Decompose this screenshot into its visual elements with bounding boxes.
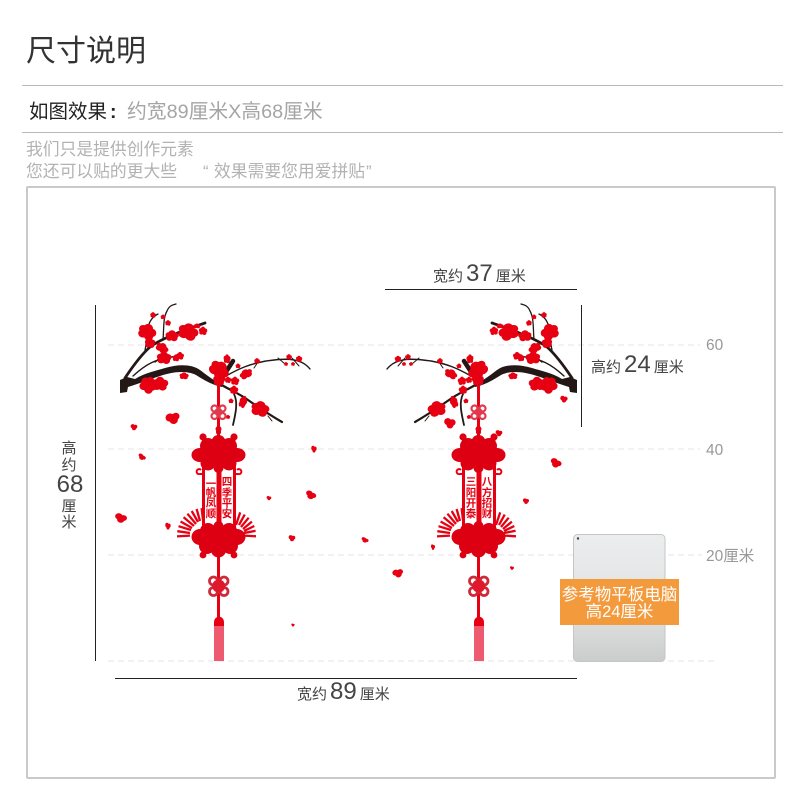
- dimension: left height text: 68: [57, 471, 83, 498]
- fans: [177, 508, 203, 536]
- side rails: [202, 462, 236, 528]
- dimension: right height line: [581, 305, 582, 427]
- curls: [197, 469, 241, 474]
- callout: tablet label: [560, 579, 679, 625]
- dimension: left height text: 米: [61, 514, 77, 531]
- grid lines: [108, 345, 718, 661]
- dimension: left height line: [95, 305, 96, 661]
- title: 尺寸说明: [26, 35, 146, 68]
- dimension: left height text: 约: [61, 457, 77, 474]
- dimension: bottom width text: 宽约89厘米: [297, 678, 390, 705]
- falling petals: [114, 396, 568, 627]
- subtitle: effect size: :: [110, 101, 116, 123]
- tablet reference object: [574, 534, 665, 662]
- dimension: left height text: [57, 440, 83, 531]
- right ornament text: 三: [466, 476, 476, 488]
- left ornament text: 帆: [206, 486, 217, 499]
- note text: ”: [366, 162, 372, 181]
- note text: 您还可以贴的更大些: [26, 162, 177, 181]
- dimension: right height text: 高约24厘米: [591, 351, 684, 378]
- upper small knot: [212, 406, 226, 419]
- right ornament text: 阳: [466, 486, 476, 499]
- dimension: top width text: 宽约37厘米: [433, 260, 526, 287]
- dimension: top width line: [385, 289, 577, 290]
- upper flower knot: [192, 429, 246, 473]
- left ornament text: 季: [222, 486, 233, 499]
- divider line bottom: [22, 132, 783, 133]
- subtitle: effect size: 如图效果: [29, 101, 107, 123]
- branch: left plum tree: [120, 304, 310, 425]
- left ornament text: 平: [222, 498, 233, 510]
- dimension: left height text: 高: [61, 440, 77, 457]
- right ornament text: 方: [482, 486, 492, 499]
- grid label 40: 40: [706, 442, 724, 459]
- right ornament text: [466, 476, 493, 520]
- note text: [26, 140, 372, 181]
- branches: [120, 365, 222, 393]
- divider line top: [22, 85, 783, 86]
- left ornament text: 凤: [206, 497, 217, 509]
- callout: tablet label: 高24厘米: [586, 602, 653, 621]
- grid label 60: 60: [706, 337, 724, 354]
- note text: “: [203, 162, 209, 181]
- dimension: left height text: 厘: [61, 498, 77, 515]
- right ornament text: 泰: [466, 507, 477, 520]
- blossoms: [136, 312, 302, 419]
- left ornament text: 顺: [206, 508, 217, 520]
- callout: tablet label: 参考物平板电脑: [562, 585, 677, 604]
- rope: [217, 385, 220, 620]
- left ornament text: 一: [206, 478, 217, 490]
- left ornament text: 四: [222, 476, 232, 488]
- ornament: right hanging Chinese knot: [437, 385, 516, 661]
- left ornament text: 安: [222, 507, 232, 520]
- ornament: left hanging Chinese knot: [177, 385, 256, 661]
- left ornament text: [206, 476, 233, 520]
- lower flower knot: [192, 521, 246, 558]
- dimension: bottom width line: [115, 678, 577, 679]
- grid label 20 cm: 20厘米: [706, 547, 754, 565]
- right ornament text: 招: [482, 496, 492, 510]
- branch: right plum tree (mirrored): [387, 304, 577, 425]
- right ornament text: 财: [482, 507, 493, 520]
- panel: size diagram frame: [27, 187, 775, 778]
- note text: 我们只是提供创作元素: [26, 140, 194, 159]
- tassel: [214, 617, 224, 661]
- subtitle: effect size: 约宽89厘米X高68厘米: [127, 101, 323, 123]
- right ornament text: 开: [466, 498, 477, 510]
- lower knot: [210, 577, 228, 596]
- note text: 效果需要您用爱拼贴: [214, 162, 365, 181]
- right ornament text: 八: [482, 476, 493, 488]
